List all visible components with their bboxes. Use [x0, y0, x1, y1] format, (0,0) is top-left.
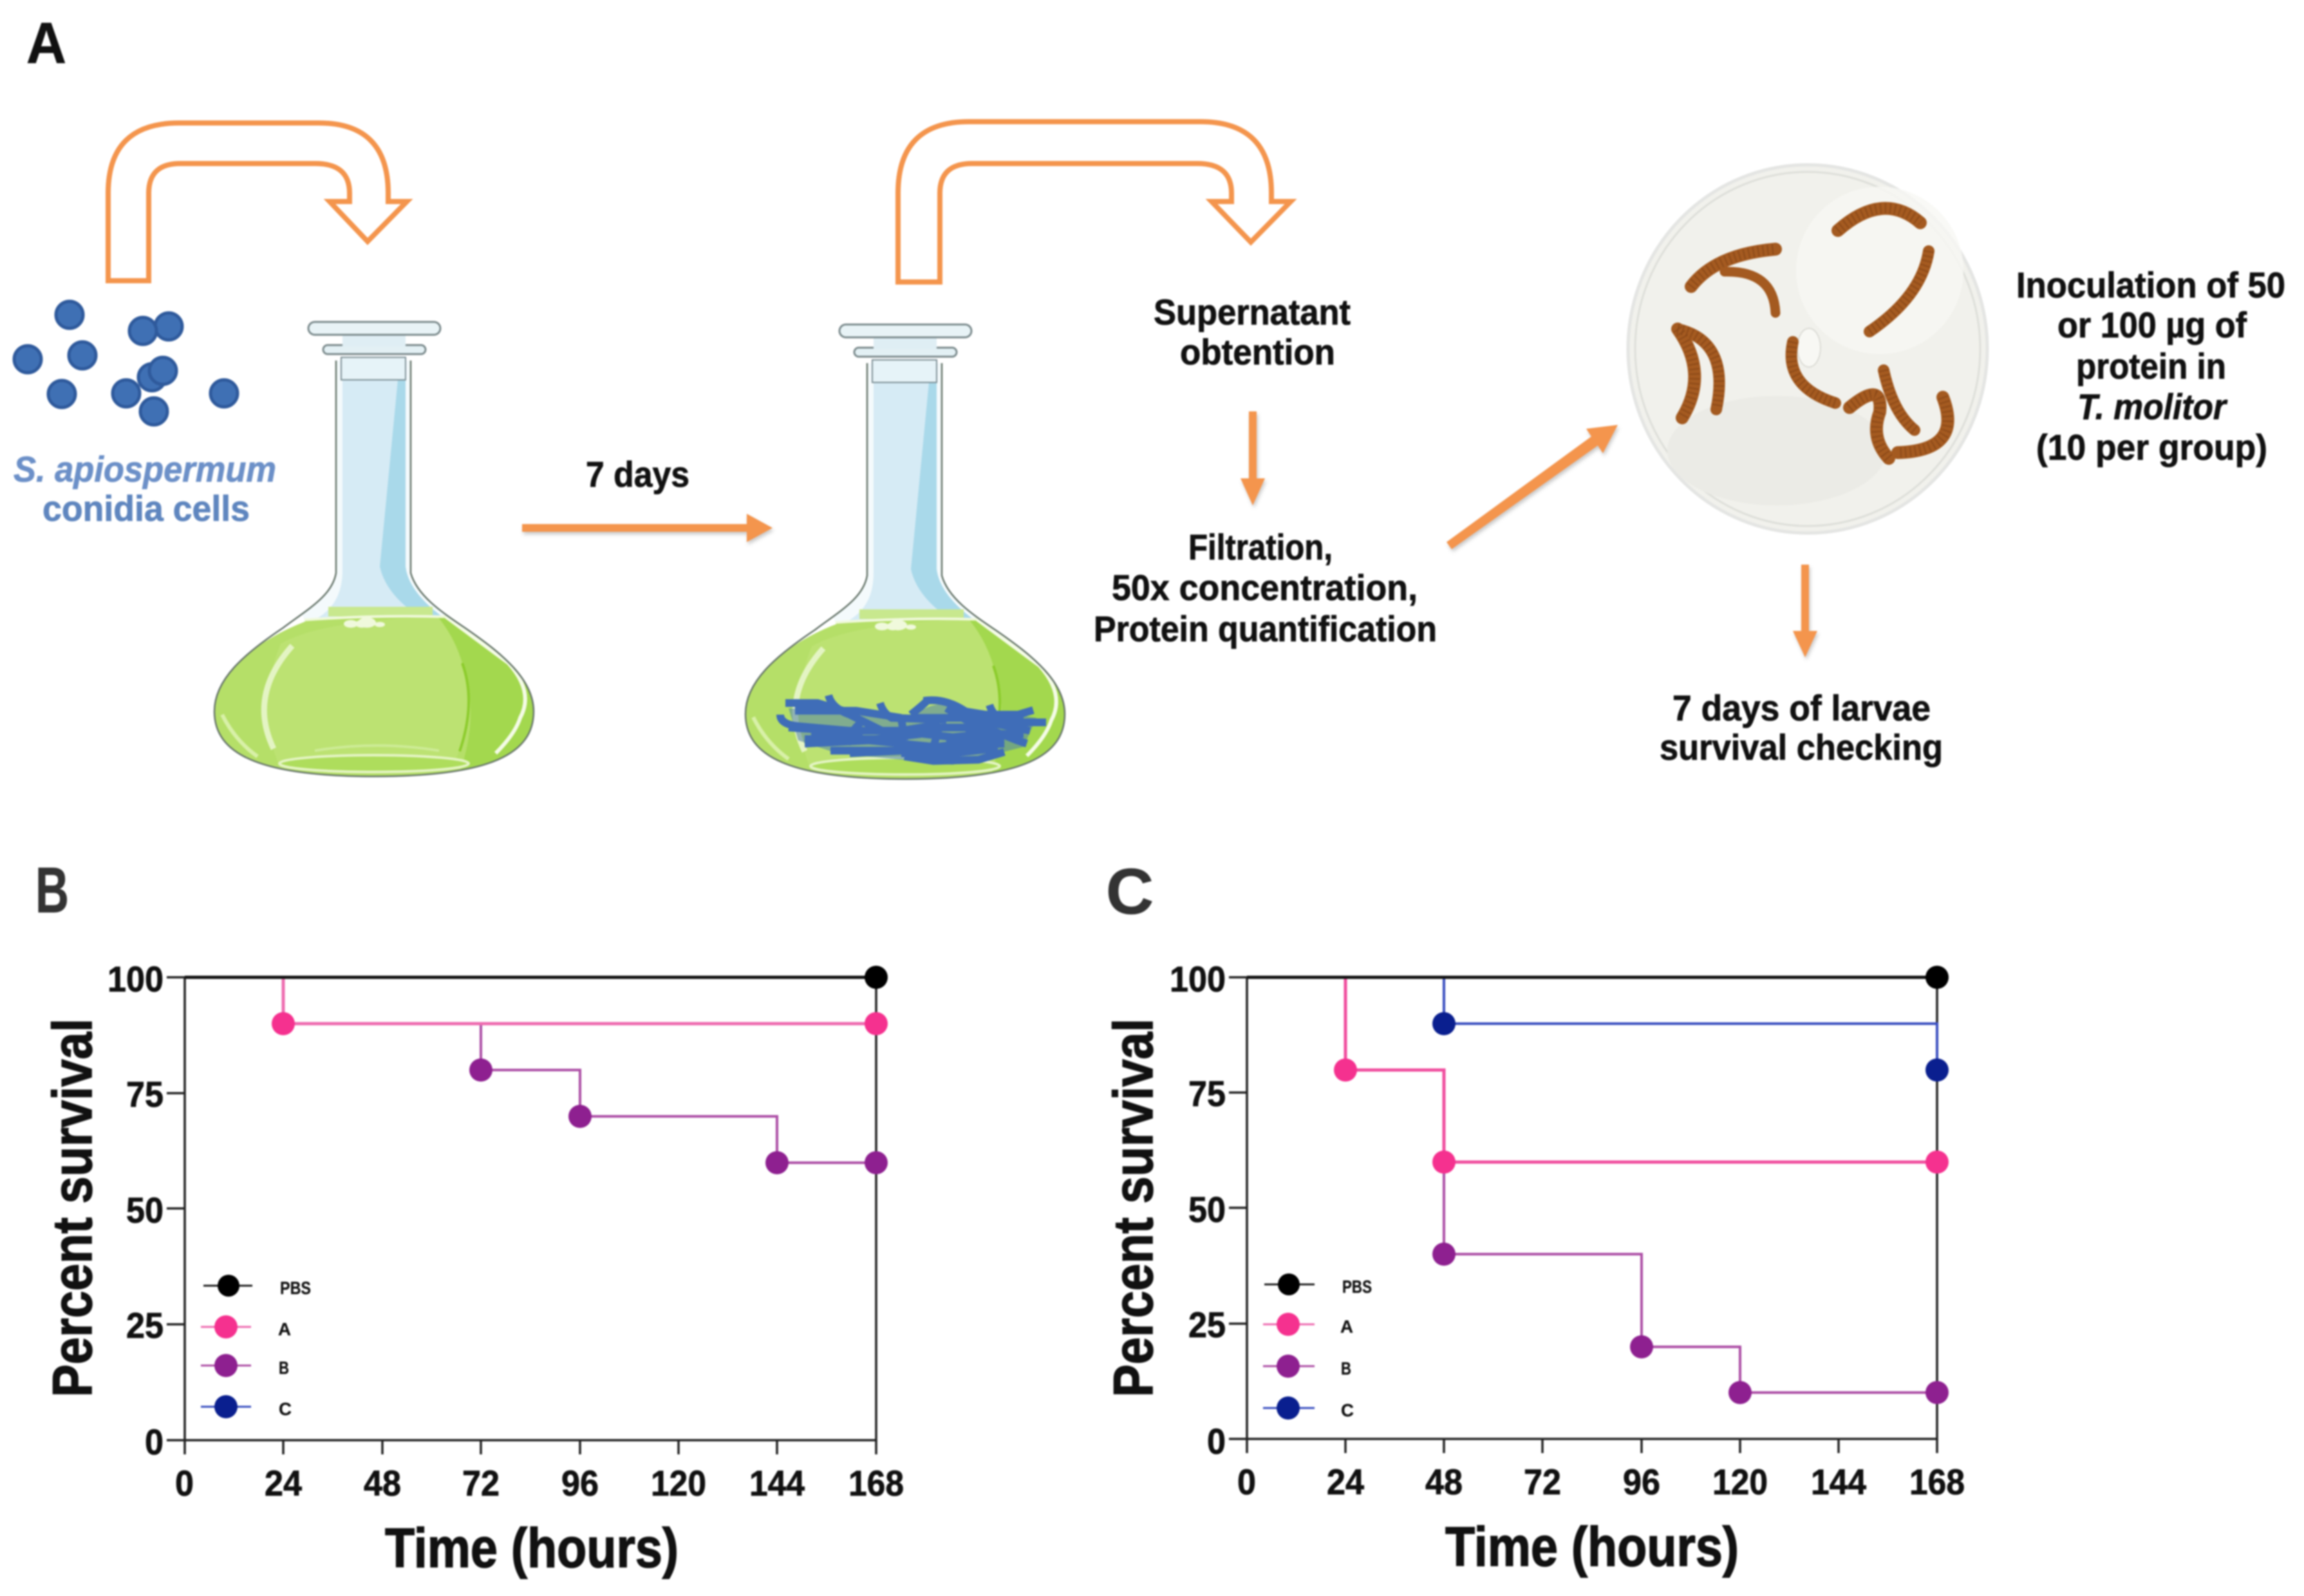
arrow: dish to survival check [1793, 565, 1817, 657]
curve: PBS [185, 966, 888, 989]
y axis title: Percent survival [1103, 1019, 1165, 1397]
curve: C [1432, 977, 1949, 1082]
x tick labels: 0 [175, 1463, 194, 1503]
x tick labels: 120 [651, 1463, 706, 1503]
y tick labels: 75 [1188, 1073, 1226, 1114]
panel label A: A [26, 12, 66, 76]
text: inoculation: Inoculation of 50 [2016, 265, 2285, 305]
panel C: survival chart [1103, 856, 1965, 1578]
x tick labels: 120 [1712, 1461, 1768, 1502]
x axis title: Time (hours) [1445, 1516, 1739, 1578]
x tick labels: 168 [1909, 1461, 1965, 1502]
curve: B [1432, 1162, 1949, 1404]
conidia label [14, 449, 276, 529]
icon: flask 1 [193, 322, 554, 798]
axes and ticks [1229, 977, 1937, 1453]
x tick labels: 24 [1327, 1461, 1364, 1502]
text: inoculation [2016, 265, 2285, 467]
x tick labels: 48 [364, 1463, 401, 1503]
curve: A [272, 977, 888, 1035]
curved arrow: conidia into flask [108, 123, 407, 281]
y tick labels: 100 [1170, 959, 1226, 999]
panel label C: C [1106, 856, 1154, 928]
x tick labels: 72 [1524, 1461, 1561, 1502]
y tick labels: 50 [126, 1190, 164, 1230]
x tick labels: 144 [1811, 1461, 1866, 1502]
x tick labels [175, 1463, 904, 1503]
curve: A [1334, 977, 1949, 1174]
text: filtration steps: Filtration, [1188, 527, 1333, 567]
arrow: incubation [522, 514, 773, 542]
x axis title: Time (hours) [385, 1517, 679, 1579]
y axis title: Percent survival [42, 1019, 104, 1397]
x tick labels: 96 [1623, 1461, 1660, 1502]
text: inoculation: or 100 µg of [2057, 305, 2247, 345]
photo: petri dish with larvae [1628, 165, 1987, 533]
curved arrow: supernatant [898, 122, 1291, 282]
y tick labels: 0 [145, 1422, 164, 1462]
y tick labels: 100 [108, 959, 164, 999]
curve: PBS [1247, 966, 1949, 989]
x tick labels: 0 [1237, 1461, 1256, 1502]
x tick labels [1237, 1461, 1965, 1502]
icon: flask 2 with mycelium [724, 324, 1085, 801]
x tick labels: 96 [561, 1463, 599, 1503]
text: filtration steps: Protein quantification [1094, 608, 1437, 649]
conidia label: conidia cells [42, 488, 250, 529]
text: supernatant obtention: obtention [1180, 332, 1335, 372]
text: inoculation: (10 per group) [2036, 427, 2267, 467]
text: filtration steps [1094, 527, 1437, 649]
text: supernatant obtention: Supernatant [1154, 292, 1351, 332]
icon: conidia cells [14, 301, 238, 425]
legend: B [279, 1358, 289, 1378]
panel A: experimental workflow [14, 12, 2285, 801]
legend: PBS [1342, 1277, 1372, 1297]
y tick labels: 25 [126, 1305, 164, 1346]
axes and ticks [167, 977, 876, 1454]
text: inoculation: protein in [2076, 346, 2226, 386]
legend: PBS [280, 1278, 311, 1298]
y tick labels: 0 [1207, 1421, 1226, 1461]
y tick labels: 75 [126, 1074, 164, 1114]
y tick labels [1170, 959, 1226, 1461]
y tick labels [108, 959, 164, 1462]
y tick labels: 50 [1188, 1189, 1226, 1230]
text: survival checking: survival checking [1660, 727, 1943, 767]
panel label B: B [35, 854, 69, 926]
legend [201, 1275, 311, 1419]
legend [1263, 1273, 1372, 1420]
text: supernatant obtention [1154, 292, 1351, 372]
text: survival checking [1660, 688, 1943, 767]
text: inoculation: T. molitor [2077, 386, 2228, 427]
curve: B [469, 1024, 888, 1174]
legend: A [278, 1319, 291, 1339]
panel B: survival chart [35, 854, 904, 1579]
y tick labels: 25 [1188, 1304, 1226, 1345]
label: 7 days: 7 days [586, 454, 689, 494]
arrow: filtration to inoculation [1447, 425, 1618, 549]
legend: C [1341, 1400, 1354, 1420]
x tick labels: 144 [749, 1463, 805, 1503]
text: survival checking: 7 days of larvae [1672, 688, 1931, 728]
legend: A [1340, 1317, 1353, 1337]
x tick labels: 72 [462, 1463, 500, 1503]
x tick labels: 168 [848, 1463, 904, 1503]
legend: C [279, 1399, 292, 1419]
x tick labels: 24 [265, 1463, 302, 1503]
conidia label: S. apiospermum [14, 449, 276, 489]
x tick labels: 48 [1425, 1461, 1463, 1502]
text: filtration steps: 50x concentration, [1112, 567, 1418, 608]
arrow: supernatant to filtration [1241, 411, 1265, 505]
legend: B [1341, 1358, 1351, 1378]
